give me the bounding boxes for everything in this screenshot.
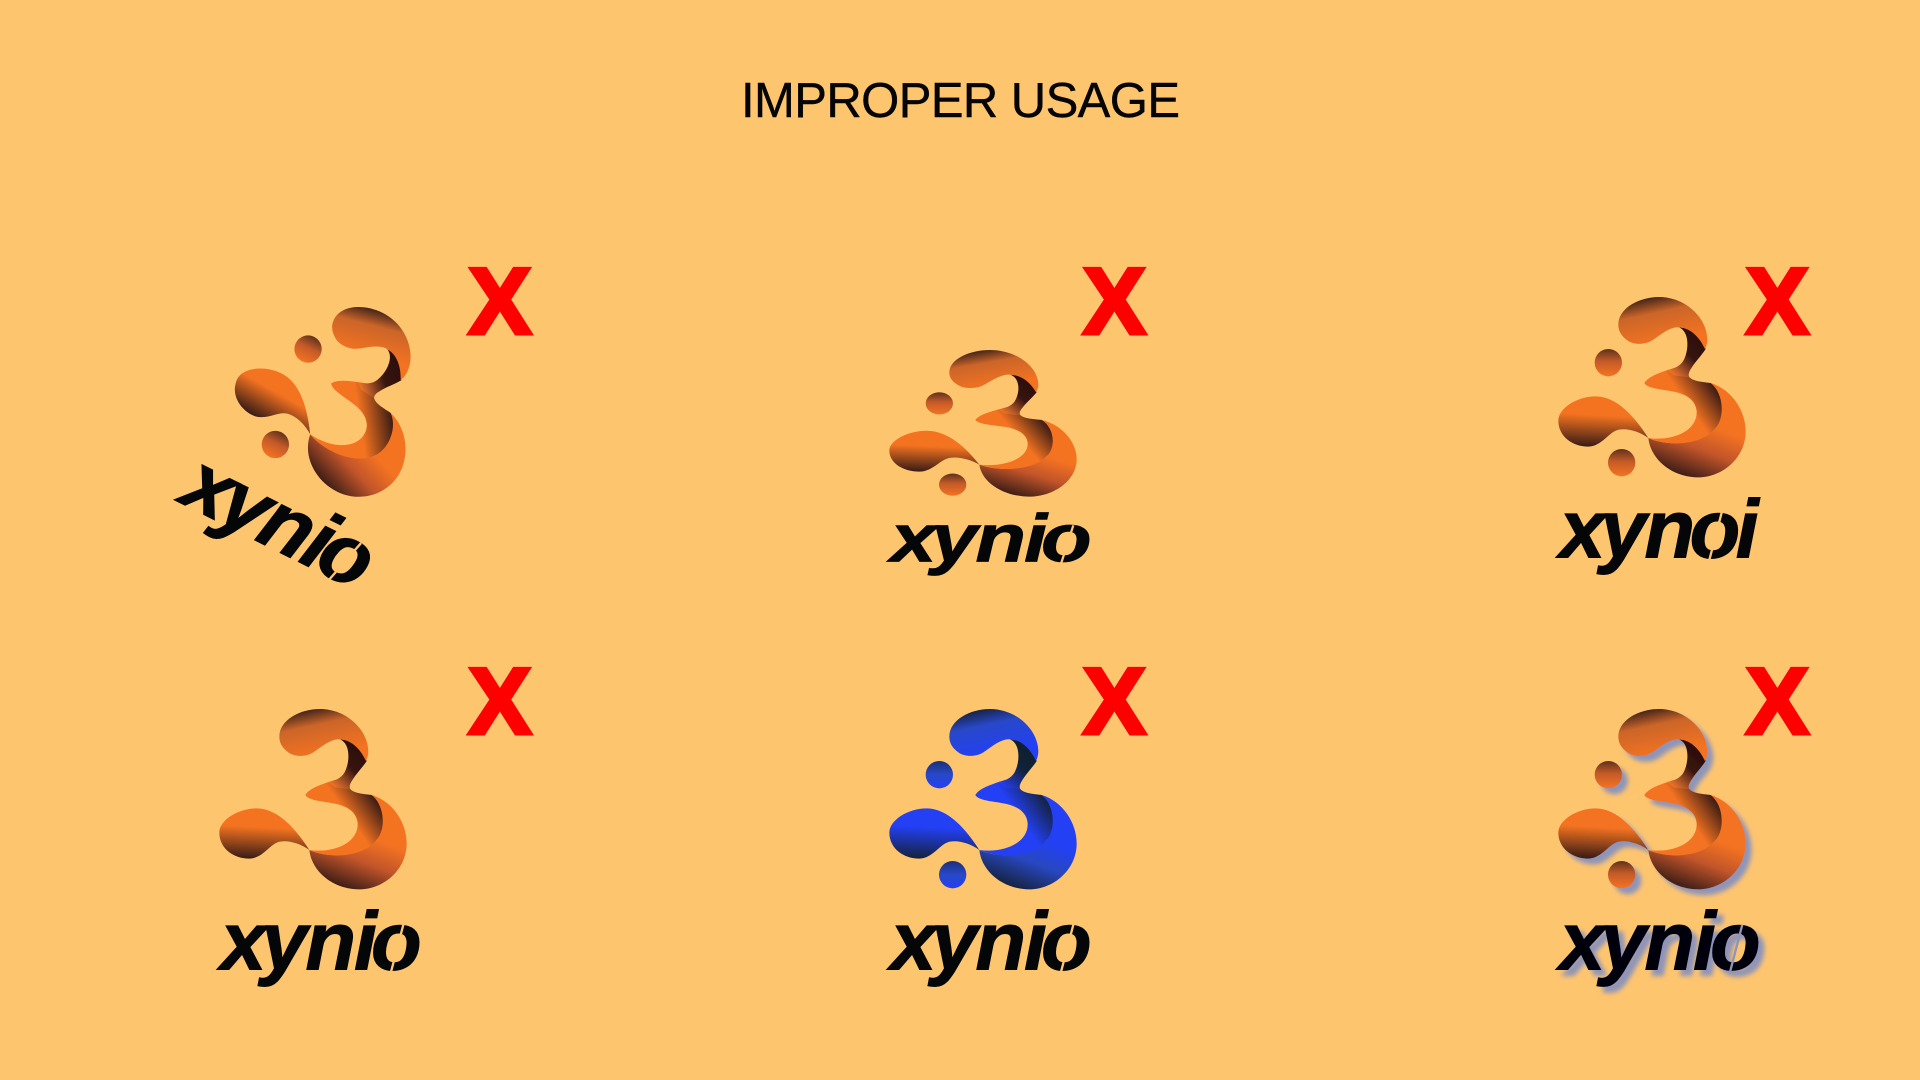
icon: red X, squashed logo: X (1083, 248, 1146, 353)
icon: red X, logo without dots: X (468, 648, 531, 753)
panel: blue logo (886, 709, 1092, 987)
title: IMPROPER USAGE (741, 74, 1180, 128)
panel: logo without dots (216, 709, 422, 987)
panel: squashed logo (886, 350, 1092, 577)
panel: logo without dots: xynio (216, 894, 422, 987)
icon: red X, drop shadow logo: X (1746, 648, 1809, 753)
icon: red X, rotated logo: X (468, 248, 531, 353)
icon: red X, blue logo: X (1083, 648, 1146, 753)
panel: rotated logo: xynio (166, 432, 391, 607)
panel: misspelled logo (1555, 297, 1761, 575)
icon: red X, misspelled logo: X (1746, 248, 1809, 353)
panel: squashed logo: xynio (886, 502, 1092, 577)
panel: logo with drop shadow (1555, 709, 1761, 987)
panel: logo with drop shadow: xynio (1555, 894, 1761, 987)
panel: blue logo: xynio (886, 894, 1092, 987)
panel: rotated logo (166, 267, 474, 607)
panel: misspelled logo: xynoi (1555, 482, 1761, 575)
